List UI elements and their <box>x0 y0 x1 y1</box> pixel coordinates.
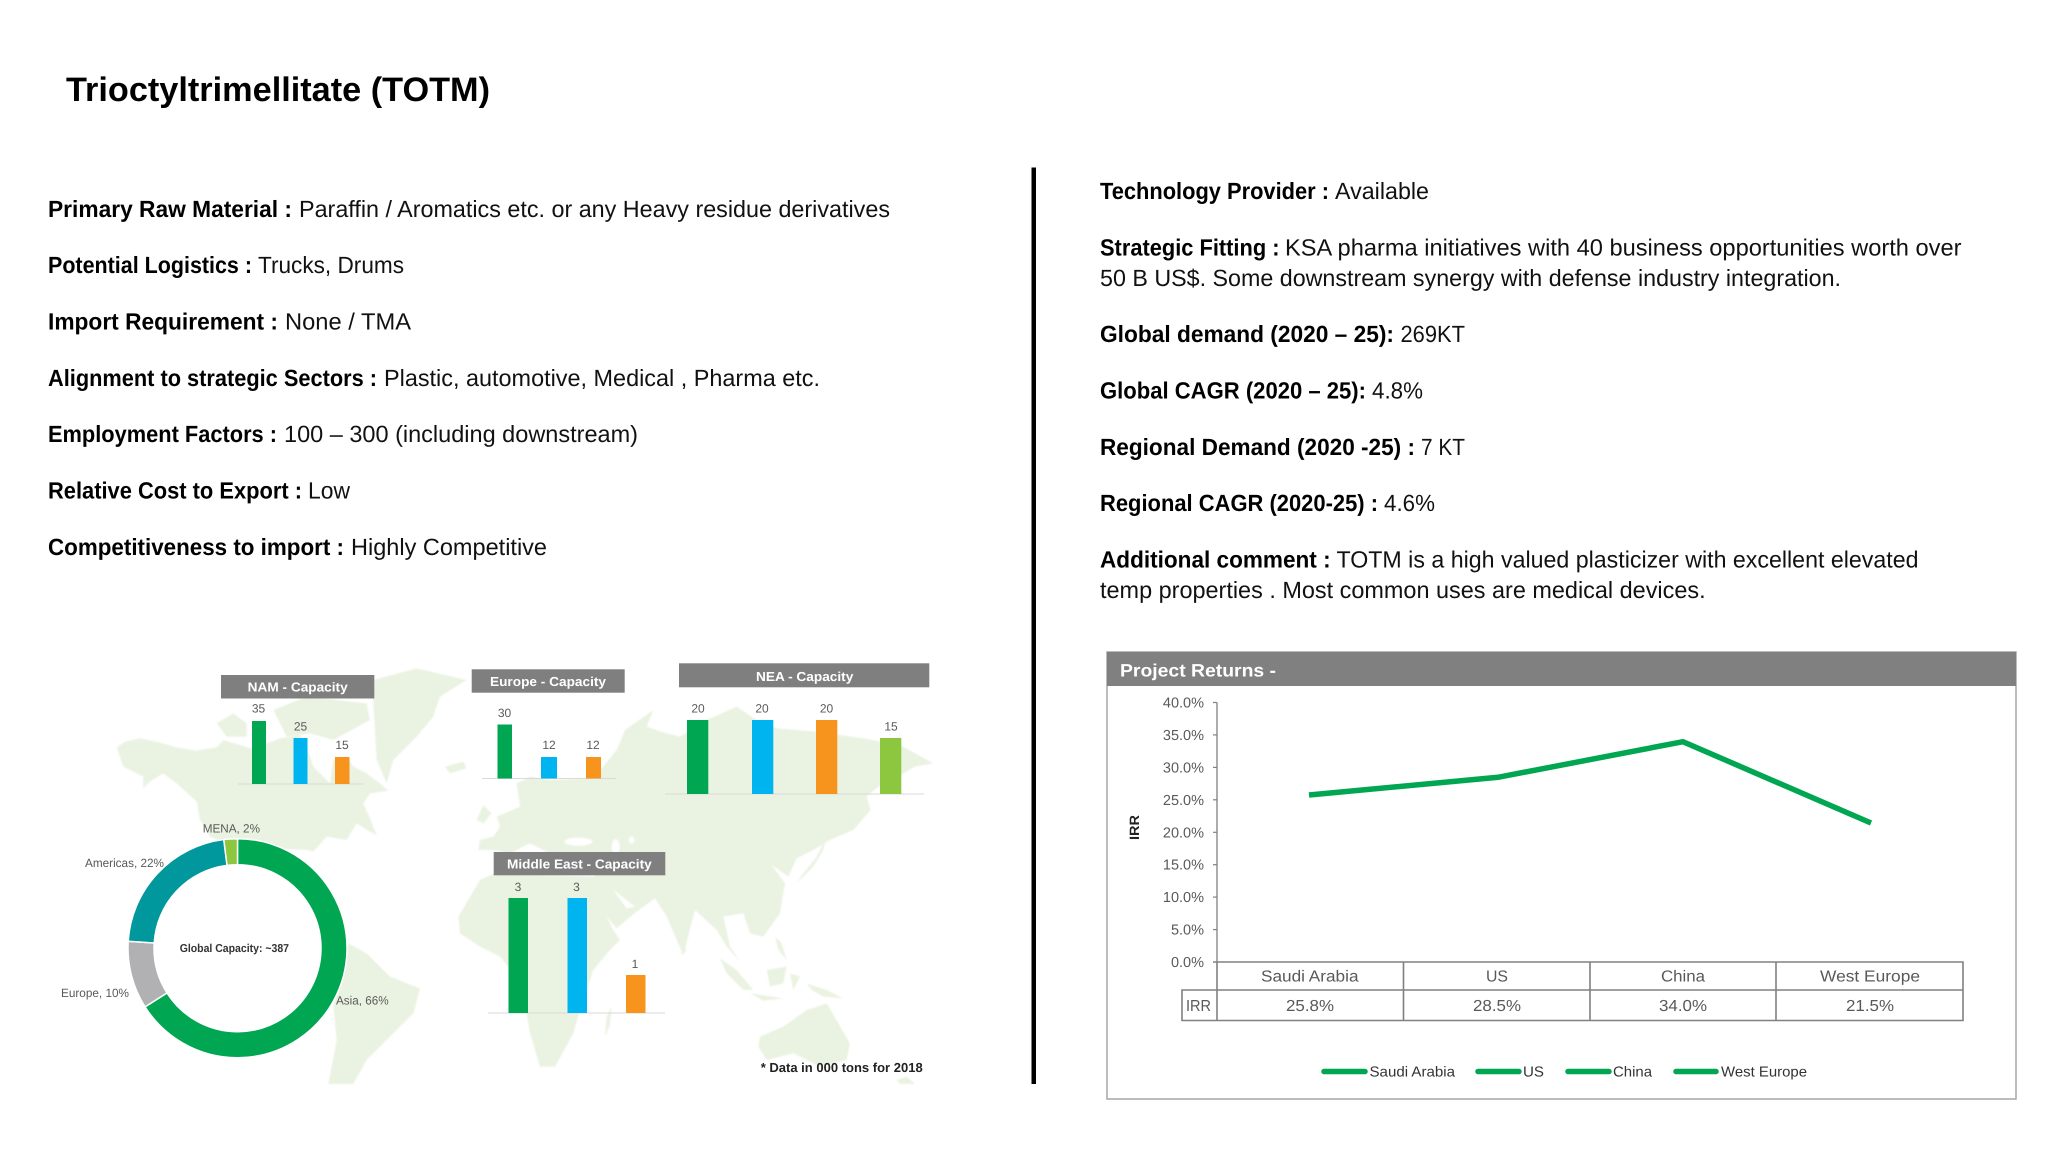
data table: China <box>1661 968 1705 986</box>
bar chart: Middle East capacity <box>488 852 665 1013</box>
attribute: employment factors: Employment Factors : <box>48 421 277 447</box>
attribute: technology provider: Technology Provider : <box>1100 178 1329 204</box>
segment: Europe 10% <box>128 941 167 1007</box>
attribute: regional demand: 7 KT <box>1421 434 1465 460</box>
attribute: primary raw material: Paraffin / Aromatics etc. or any Heavy residue derivatives <box>299 196 890 222</box>
text block: right attributes <box>1100 178 1962 603</box>
attribute: competitiveness to import <box>48 534 547 560</box>
title: Trioctyltrimellitate (TOTM) <box>66 71 490 109</box>
y axis: 0.0% <box>1171 955 1204 971</box>
donut chart: global capacity <box>61 822 389 1058</box>
attribute: additional comment: temp properties . Most common uses are medical devices. <box>1100 577 1706 603</box>
line series: IRR by region <box>1309 742 1871 823</box>
bar chart: NAM capacity: 35 <box>252 702 265 716</box>
y axis: 40.0% <box>1163 696 1204 712</box>
attribute: employment factors <box>48 421 638 447</box>
data table: IRR <box>1186 998 1211 1015</box>
attribute: alignment to strategic sectors <box>48 365 820 391</box>
y axis: 20.0% <box>1163 825 1204 841</box>
attribute: import requirement <box>48 308 411 334</box>
data table <box>1182 962 1963 1020</box>
data table: US <box>1486 968 1508 986</box>
header: NAM <box>221 675 374 698</box>
legend: US <box>1523 1064 1544 1080</box>
data table: 28.5% <box>1473 998 1521 1015</box>
attribute: import requirement: None / TMA <box>285 308 411 334</box>
attribute: global demand: Global demand (2020 – 25): <box>1100 321 1394 347</box>
header: Europe: Europe - Capacity <box>490 674 607 689</box>
attribute: import requirement: Import Requirement : <box>48 308 278 334</box>
legend: West Europe <box>1721 1064 1807 1080</box>
bar chart: Europe capacity: 12 <box>586 738 600 752</box>
data table: Saudi Arabia <box>1261 968 1359 986</box>
y axis: 15.0% <box>1163 858 1204 874</box>
attribute: competitiveness to import: Competitiveness to import : <box>48 534 344 560</box>
attribute: competitiveness to import: Highly Competitive <box>351 534 547 560</box>
attribute: strategic fitting: Strategic Fitting : <box>1100 235 1280 261</box>
attribute: additional comment <box>1100 546 1918 603</box>
y axis: 25.0% <box>1163 793 1204 809</box>
legend: China <box>1613 1064 1653 1080</box>
legend: Saudi Arabia <box>1370 1064 1456 1080</box>
text block: left attributes <box>48 196 890 560</box>
panel header <box>1107 652 2016 686</box>
header: Middle East <box>494 852 665 875</box>
bar chart: Middle East capacity: 1 <box>632 957 639 971</box>
bar chart: Europe capacity <box>472 669 625 778</box>
attribute: primary raw material <box>48 196 890 222</box>
attribute: global cagr: Global CAGR (2020 – 25): <box>1100 378 1366 404</box>
bar chart: Middle East capacity: 3 <box>515 880 522 894</box>
footnote: * Data in 000 tons for 2018 <box>761 1060 923 1075</box>
header: NEA: NEA - Capacity <box>756 669 854 684</box>
attribute: employment factors: 100 – 300 (including downstream) <box>284 421 638 447</box>
divider line <box>1032 168 1036 1084</box>
attribute: potential logistics: Potential Logistics : <box>48 252 252 278</box>
header: NAM: NAM - Capacity <box>248 680 348 695</box>
attribute: potential logistics: Trucks, Drums <box>258 252 404 278</box>
label: global capacity: Global Capacity: ~387 <box>180 943 289 955</box>
header: Europe <box>472 669 625 693</box>
attribute: strategic fitting: 50 B US$. Some downstream synergy with defense industry integration. <box>1100 265 1841 291</box>
bar chart: Europe capacity: 30 <box>498 706 511 720</box>
label: Europe: Europe, 10% <box>61 986 129 1000</box>
attribute: potential logistics <box>48 252 404 278</box>
segment: Americas 22% <box>128 840 227 943</box>
bar chart: NAM capacity <box>221 675 374 784</box>
bar chart: NAM capacity: 15 <box>335 738 349 752</box>
attribute: strategic fitting <box>1100 235 1962 291</box>
bar chart: NEA capacity: 15 <box>884 720 898 734</box>
attribute: strategic fitting: KSA pharma initiatives with 40 business opportunities worth over <box>1285 235 1962 261</box>
data table: 25.8% <box>1286 998 1334 1015</box>
attribute: regional demand: Regional Demand (2020 -25) : <box>1100 434 1415 460</box>
attribute: relative cost to export: Relative Cost to Export : <box>48 478 302 504</box>
attribute: alignment to strategic sectors: Alignment to strategic Sectors : <box>48 365 377 391</box>
panel: project returns <box>1107 652 2016 1099</box>
bar chart: NEA capacity <box>665 663 929 794</box>
segment: MENA 2% <box>224 839 238 865</box>
attribute: additional comment: TOTM is a high valued plasticizer with excellent elevated <box>1336 546 1918 572</box>
bar chart: NEA capacity: 20 <box>691 702 705 716</box>
attribute: regional cagr: Regional CAGR (2020-25) : <box>1100 490 1378 516</box>
attribute: technology provider: Available <box>1335 178 1429 204</box>
attribute: global cagr: 4.8% <box>1372 378 1423 404</box>
y axis: 35.0% <box>1163 728 1204 744</box>
y axis <box>1163 696 1217 971</box>
header: NEA <box>679 663 929 687</box>
segment: Asia 66% <box>145 839 347 1058</box>
bar chart: NAM capacity: 25 <box>294 720 307 734</box>
y axis: 5.0% <box>1171 923 1204 939</box>
data table: West Europe <box>1820 968 1920 986</box>
label: Asia: Asia, 66% <box>336 993 389 1007</box>
data table: 21.5% <box>1846 998 1894 1015</box>
header: Middle East: Middle East - Capacity <box>507 856 653 871</box>
attribute: regional cagr: 4.6% <box>1384 490 1435 516</box>
world map background <box>117 668 933 1084</box>
bar chart: NEA capacity: 20 <box>820 702 833 716</box>
data table: 34.0% <box>1659 998 1707 1015</box>
label: Americas: Americas, 22% <box>85 856 164 870</box>
y axis: 30.0% <box>1163 760 1204 776</box>
attribute: primary raw material: Primary Raw Material : <box>48 196 292 222</box>
attribute: alignment to strategic sectors: Plastic, automotive, Medical , Pharma etc. <box>384 365 820 391</box>
attribute: additional comment: Additional comment : <box>1100 546 1331 572</box>
y axis: 10.0% <box>1163 890 1204 906</box>
axis title: IRR: IRR <box>1127 815 1142 840</box>
bar chart: Middle East capacity: 3 <box>573 880 580 894</box>
bar chart: NEA capacity: 20 <box>755 702 769 716</box>
legend <box>1324 1064 1807 1080</box>
bar chart: Europe capacity: 12 <box>542 738 556 752</box>
label: MENA: MENA, 2% <box>203 822 260 836</box>
panel header: Project Returns - <box>1120 661 1276 681</box>
attribute: relative cost to export: Low <box>308 478 351 504</box>
attribute: global demand: 269KT <box>1400 321 1465 347</box>
